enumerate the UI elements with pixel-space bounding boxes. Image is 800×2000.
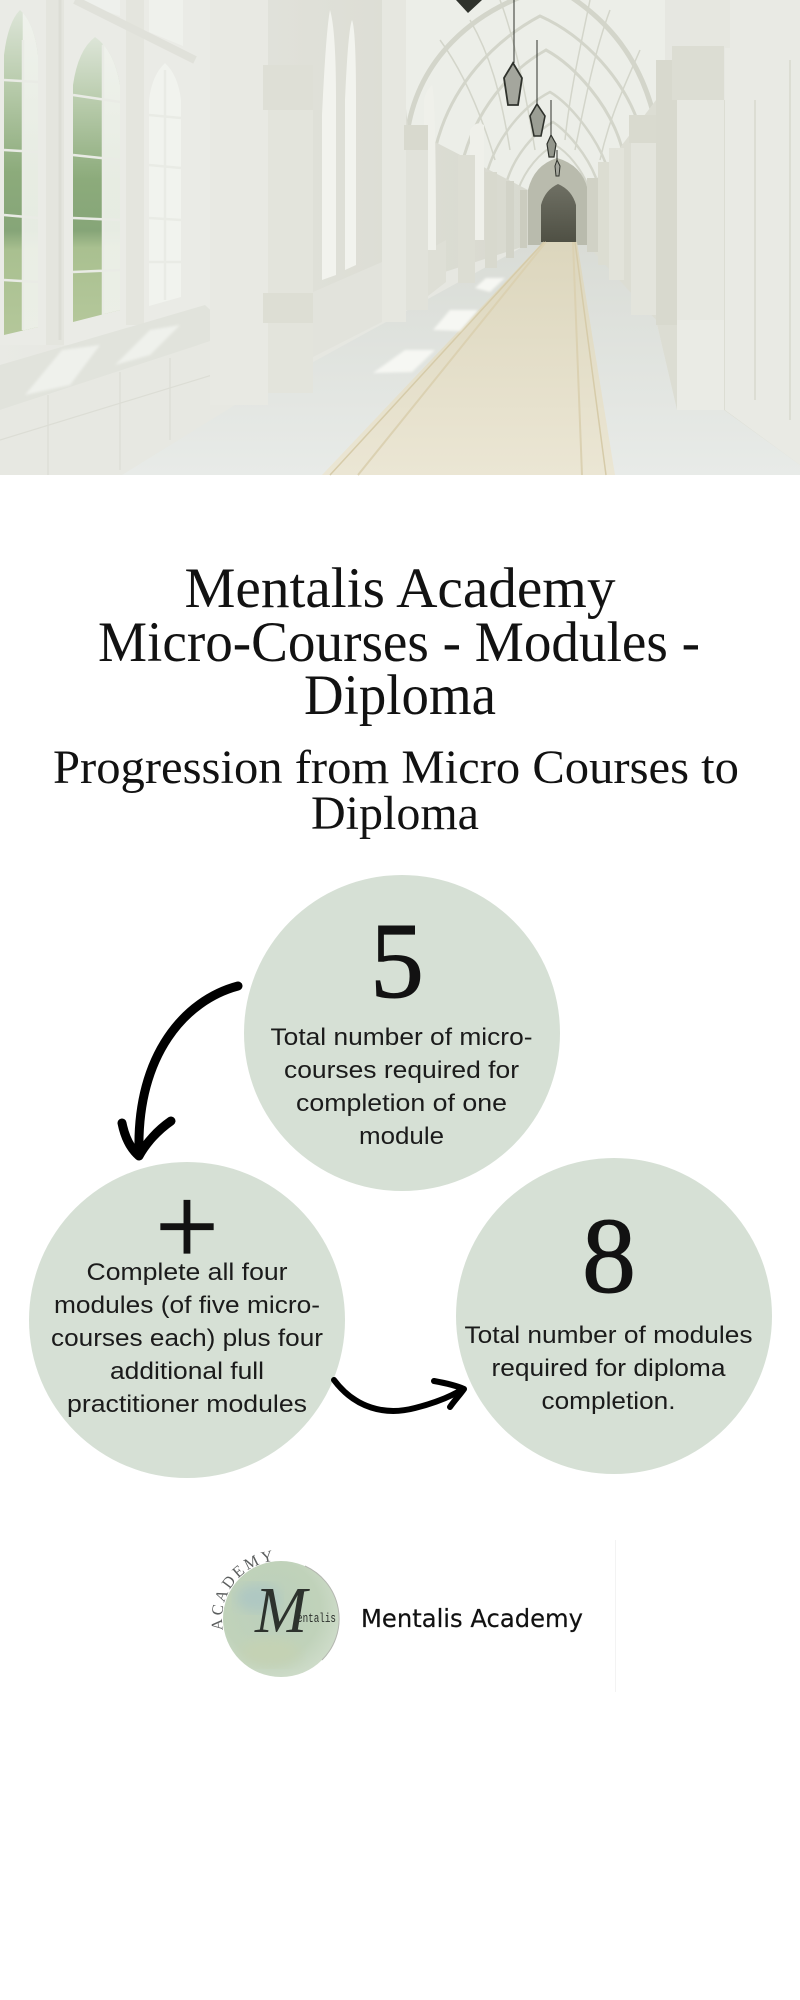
sunlight patches on floor — [373, 278, 505, 373]
circle: plus additional modules: additional full — [110, 1358, 264, 1385]
title: Diploma — [304, 664, 496, 727]
circle: plus additional modules: + — [155, 1165, 219, 1289]
hanging lanterns — [456, 0, 560, 176]
circle: plus additional modules: courses each) plus four — [51, 1325, 323, 1352]
hero photo: white gothic corridor — [0, 0, 800, 475]
circle: five micro-courses: Total number of micro- — [270, 1024, 532, 1051]
right wall surface — [588, 100, 800, 465]
faint vertical divider — [615, 1540, 616, 1692]
logo wordmark: Mentalis Academy — [361, 1604, 583, 1633]
circle: plus additional modules: Complete all four — [86, 1259, 288, 1286]
subtitle: Diploma — [311, 787, 479, 840]
circle: plus additional modules: practitioner modules — [67, 1391, 307, 1418]
arrow: from plus to eight — [334, 1380, 464, 1411]
circle: five micro-courses — [244, 875, 560, 1191]
circle: eight modules: required for diploma — [492, 1355, 726, 1382]
left wall upper surface — [0, 0, 528, 410]
circle: five micro-courses: 5 — [370, 902, 424, 1021]
big windows on the left — [0, 0, 210, 345]
circle: eight modules: Total number of modules — [464, 1322, 752, 1349]
logo: Mentalis watercolor badge: entalis — [297, 1611, 336, 1626]
title — [98, 557, 700, 727]
circle: eight modules — [456, 1158, 772, 1474]
corridor ceiling vaults — [395, 0, 665, 240]
far end of corridor with dark door — [528, 158, 588, 245]
left wall sections and columns — [210, 0, 527, 405]
logo: Mentalis watercolor badge: M — [254, 1574, 311, 1647]
title: Mentalis Academy — [184, 557, 616, 620]
circle: eight modules: completion. — [542, 1388, 676, 1415]
title: Micro-Courses - Modules - — [98, 611, 700, 674]
carpet runner — [322, 242, 615, 475]
circle: plus additional modules — [29, 1162, 345, 1478]
subtitle: Progression from Micro Courses to — [53, 741, 739, 794]
window sill and lower wall — [0, 305, 235, 475]
circle: five micro-courses: completion of one — [296, 1090, 507, 1117]
circle: eight modules: 8 — [582, 1197, 636, 1316]
logo: Mentalis watercolor badge — [212, 1550, 340, 1677]
arrow: from five to plus — [122, 986, 238, 1156]
circle: five micro-courses: module — [359, 1123, 444, 1150]
logo: Mentalis watercolor badge: ACADEMY — [212, 1550, 272, 1630]
floor — [122, 245, 800, 475]
circle: five micro-courses: courses required for — [284, 1057, 519, 1084]
circle: plus additional modules: modules (of five micro- — [54, 1292, 320, 1319]
subtitle — [53, 741, 739, 840]
right wall and columns — [587, 0, 800, 465]
